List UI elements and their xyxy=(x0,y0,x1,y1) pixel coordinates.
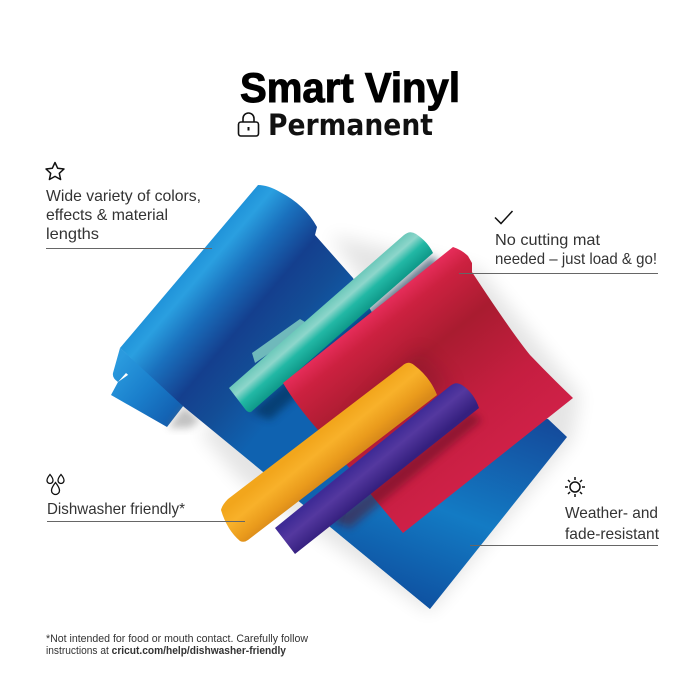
blue sheet lower section xyxy=(340,400,567,609)
icon: check xyxy=(495,211,512,224)
purple roll xyxy=(275,383,479,554)
teal roll shadow xyxy=(252,256,442,420)
callout: variety: effects & material xyxy=(46,207,168,224)
callout: no cutting mat: No cutting mat xyxy=(495,232,601,249)
footnote: *Not intended for food or mouth contact. Carefully follow xyxy=(46,633,308,645)
title: Smart Vinyl xyxy=(240,64,460,111)
teal roll xyxy=(229,232,433,412)
shadow beside fold xyxy=(168,406,200,428)
callout: no cutting mat xyxy=(459,211,658,274)
soft shadow under the rolls xyxy=(200,235,580,612)
shadow on red from rolls xyxy=(330,412,482,528)
callout: weather xyxy=(470,477,660,546)
orange roll xyxy=(221,363,437,542)
callout: variety: Wide variety of colors, xyxy=(46,188,201,205)
callout: no cutting mat: needed – just load & go! xyxy=(495,251,657,268)
teal sheet piece xyxy=(252,319,310,363)
red sheet xyxy=(283,247,573,533)
blue roll and sheet xyxy=(120,185,430,609)
footnote: instructions at cricut.com/help/dishwasher-friendly xyxy=(46,645,287,657)
icon: sun xyxy=(565,477,585,497)
icon: lock xyxy=(238,113,258,136)
callout: weather: Weather- and xyxy=(565,505,658,522)
icon: water drops xyxy=(47,474,64,494)
footnote xyxy=(46,633,308,657)
icon: star xyxy=(46,162,64,180)
blue roll folds xyxy=(111,348,184,427)
callout: variety: lengths xyxy=(46,226,99,243)
callout: weather: fade-resistant xyxy=(565,526,660,543)
callout: dishwasher xyxy=(47,474,245,522)
photo: vinyl rolls and sheets xyxy=(111,185,580,612)
callout: variety xyxy=(46,162,212,249)
subtitle: Permanent: Permanent xyxy=(268,108,433,142)
callout: dishwasher: Dishwasher friendly* xyxy=(47,501,185,518)
